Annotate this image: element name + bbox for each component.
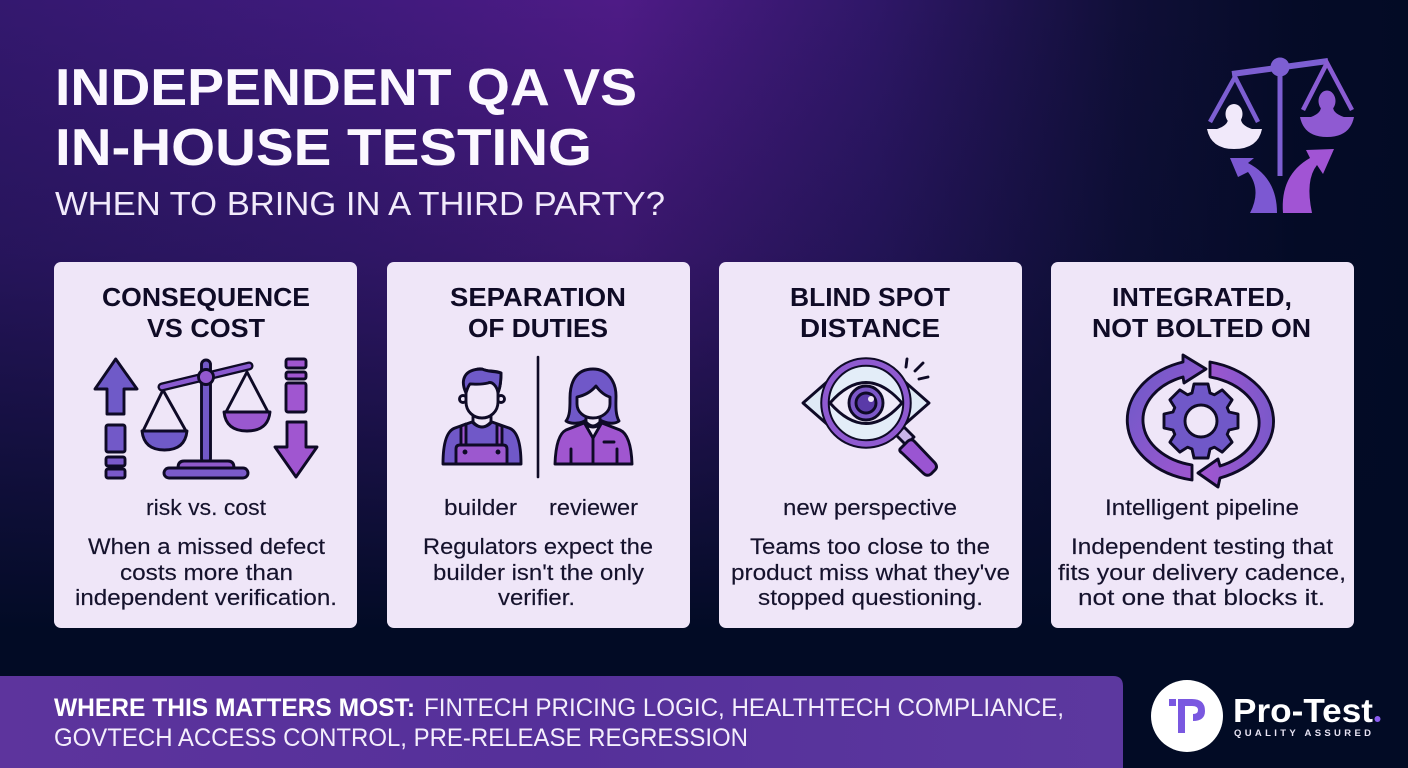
tagline: QUALITY ASSURED	[1234, 728, 1371, 739]
divider	[537, 357, 539, 477]
text block: builder isn't the only	[433, 560, 644, 585]
text block: Independent testing that	[1071, 534, 1333, 559]
icon: scales with people and diverging arrows	[1207, 58, 1354, 213]
label: new perspective: new perspective	[783, 495, 957, 520]
text block: costs more than	[120, 560, 293, 585]
text block	[423, 534, 653, 610]
icon: gear in circular arrows	[1127, 355, 1274, 487]
text block: product miss what they've	[731, 560, 1010, 585]
label: intelligent pipeline: Intelligent pipeline	[1105, 495, 1299, 520]
icon: tilted scale with up and down arrows	[95, 359, 317, 478]
heading: blind spot distance	[790, 282, 950, 343]
label: reviewer: reviewer	[549, 495, 638, 520]
footer banner	[0, 676, 1123, 768]
text block	[1058, 534, 1346, 610]
heading: integrated not bolted on: NOT BOLTED ON	[1092, 313, 1311, 343]
text block: independent verification.	[75, 585, 337, 610]
text block: not one that blocks it.	[1078, 585, 1325, 610]
heading: blind spot distance: DISTANCE	[800, 313, 940, 343]
text block: fits your delivery cadence,	[1058, 560, 1346, 585]
icon: logo mark	[1151, 680, 1223, 752]
logo: Pro-Test	[1151, 680, 1380, 752]
panel: integrated not bolted on	[1051, 262, 1354, 628]
subtitle: WHEN TO BRING IN A THIRD PARTY?	[55, 185, 665, 222]
title	[55, 59, 637, 177]
footer text: FINTECH PRICING LOGIC, HEALTHTECH COMPLIANCE,	[424, 694, 1064, 722]
label: builder: builder	[444, 495, 517, 520]
icon: reviewer	[555, 369, 632, 464]
icon: builder	[443, 369, 521, 464]
text block: stopped questioning.	[758, 585, 983, 610]
heading: consequence vs cost: VS COST	[147, 313, 265, 343]
text block: Teams too close to the	[750, 534, 990, 559]
text block	[731, 534, 1010, 610]
heading: separation of duties: SEPARATION	[450, 282, 626, 312]
heading: blind spot distance: BLIND SPOT	[790, 282, 950, 312]
wordmark: Pro-Test	[1233, 692, 1373, 729]
heading: separation of duties	[450, 282, 626, 343]
text block: Regulators expect the	[423, 534, 653, 559]
heading: integrated not bolted on	[1092, 282, 1311, 343]
panel: blind spot distance	[719, 262, 1022, 628]
footer text: GOVTECH ACCESS CONTROL, PRE-RELEASE REGRESSION	[54, 724, 748, 752]
wordmark dot	[1374, 716, 1380, 722]
panel: consequence vs cost	[54, 262, 357, 628]
icon: eye under magnifying glass	[803, 359, 936, 475]
heading: separation of duties: OF DUTIES	[468, 313, 608, 343]
text block: verifier.	[498, 585, 575, 610]
title: INDEPENDENT QA VS	[55, 59, 637, 117]
footer text	[54, 694, 1064, 752]
heading: consequence vs cost	[102, 282, 310, 343]
footer text: WHERE THIS MATTERS MOST:	[54, 694, 415, 722]
text block	[75, 534, 337, 610]
label: risk vs. cost: risk vs. cost	[146, 495, 266, 520]
heading: integrated not bolted on: INTEGRATED,	[1112, 282, 1292, 312]
text block: When a missed defect	[88, 534, 325, 559]
title: IN-HOUSE TESTING	[55, 119, 592, 177]
panel: separation of duties	[387, 262, 690, 628]
heading: consequence vs cost: CONSEQUENCE	[102, 282, 310, 312]
